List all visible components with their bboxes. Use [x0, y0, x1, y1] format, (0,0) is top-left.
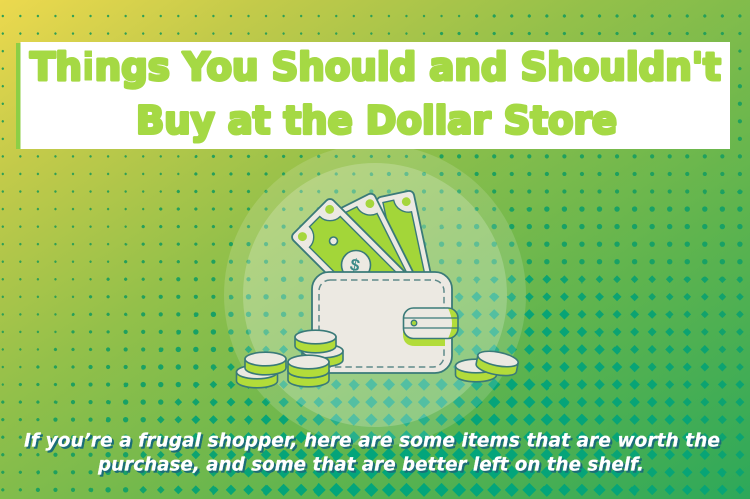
icon: front bill [290, 197, 422, 329]
wallet with cash illustration [236, 190, 519, 388]
icon: right coins [456, 348, 519, 382]
wallet body [312, 272, 452, 373]
title text: Things You Should and Shouldn't [30, 45, 721, 89]
subtitle text: purchase, and some that are better left on the shelf. [97, 454, 644, 476]
icon: dollar medallion [342, 250, 370, 280]
glow circles behind wallet [224, 144, 526, 446]
icon: middle bill [337, 192, 422, 308]
subtitle text [24, 430, 720, 476]
title text [30, 45, 721, 142]
icon: left coin stack [236, 352, 286, 388]
banner box [20, 42, 730, 149]
wallet stitching [319, 280, 444, 367]
banner accent strip [16, 43, 21, 149]
icon: centre coin stack [288, 330, 343, 387]
title banner [16, 42, 730, 149]
wallet clasp [403, 308, 458, 346]
title text: Buy at the Dollar Store [136, 98, 617, 142]
subtitle text: If you’re a frugal shopper, here are some items that are worth the [24, 430, 720, 452]
icon: dollar medallion: $ [348, 255, 362, 276]
icon: back bill [376, 190, 436, 305]
icon: bill hole [330, 237, 338, 245]
